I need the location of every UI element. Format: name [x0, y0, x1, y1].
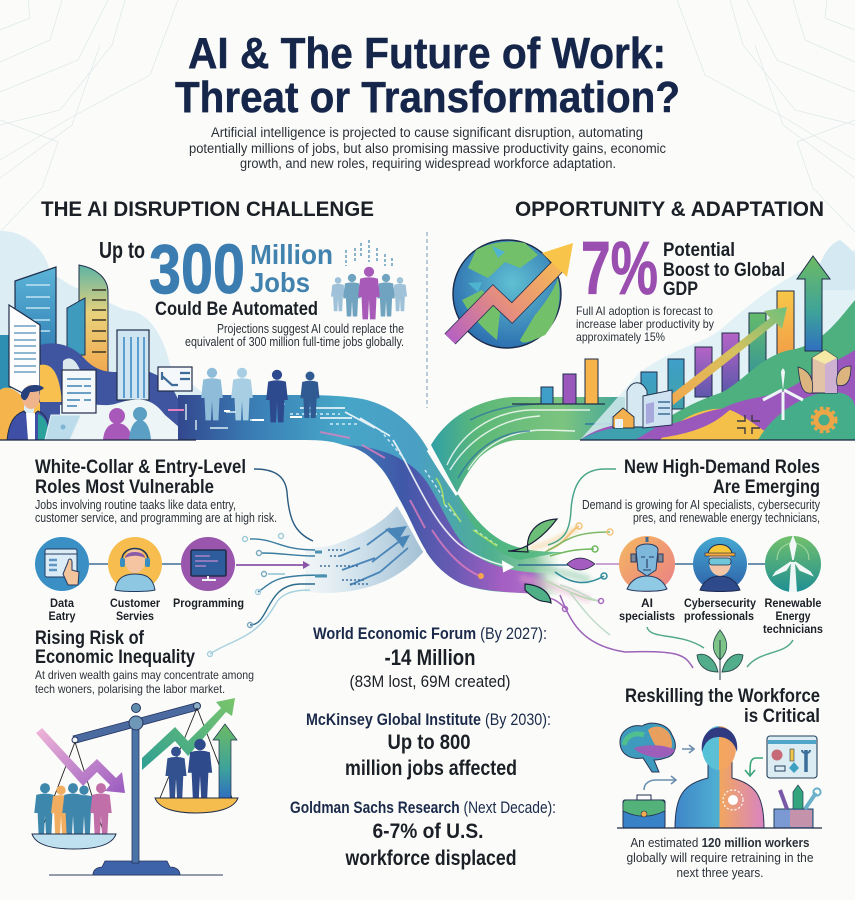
figure: businessman at laptop — [7, 385, 81, 440]
title — [175, 29, 680, 122]
panel: economic inequality: tech woners, polarising the labor market. — [35, 682, 225, 696]
text: growing demand: Demand is growing for AI specialists, cybersecurity — [582, 498, 821, 512]
icon: workforce people — [331, 240, 407, 319]
stat: 7 percent GDP: increase laber productivity by — [576, 317, 714, 331]
stat: 7 percent GDP: GDP — [663, 279, 698, 300]
arrow: falling purple — [36, 728, 125, 793]
panel: economic inequality: Economic Inequality — [35, 647, 195, 668]
heading: vulnerable roles: White-Collar & Entry-Level — [35, 457, 246, 478]
panel: economic inequality: Rising Risk of — [35, 628, 145, 649]
baseline: left scene — [0, 439, 196, 441]
center stat: McKinsey: million jobs affected — [345, 757, 517, 780]
ribbon: blue disruption flow — [178, 395, 562, 596]
fan: connector lines from flow — [518, 469, 793, 668]
illustration: balance scale — [32, 698, 238, 875]
pan: right — [155, 798, 238, 813]
illustration: green hills and growth bars — [580, 240, 855, 440]
icon labels: Customer — [110, 596, 160, 610]
role labels: professionals — [684, 609, 754, 623]
icon: wind energy — [765, 536, 821, 592]
stat: 300 million jobs: Jobs — [250, 267, 310, 298]
icon: factory buildings — [613, 383, 672, 428]
arrow: big green up arrow — [797, 256, 830, 351]
icon labels: Eatry — [48, 609, 76, 623]
role labels: AI — [641, 596, 653, 610]
center stat: World Economic Forum: World Economic Forum (By 2027): — [313, 624, 547, 643]
stat: 7 percent GDP: Full AI adoption is forecast to — [576, 304, 713, 318]
text: routine tasks: customer service, and programming are at high risk. — [35, 511, 277, 525]
panel: economic inequality — [35, 628, 254, 696]
center stat: McKinsey: Up to 800 — [388, 731, 470, 754]
panel: economic inequality: At driven wealth gains may concentrate among — [35, 668, 254, 682]
panel: reskilling the workforce — [617, 686, 822, 880]
text: retraining estimate — [626, 835, 814, 880]
heading: vulnerable roles: Roles Most Vulnerable — [35, 477, 214, 498]
role labels: Cybersecurity — [684, 596, 756, 610]
icon: wind turbine — [763, 368, 803, 420]
stat: 300 million jobs: 300 — [149, 230, 245, 308]
stat: 300 million jobs: Could Be Automated — [155, 298, 318, 320]
icon: cube and leaves — [798, 350, 851, 393]
icon: leaves on the flow — [508, 519, 595, 603]
icon: AI specialist — [619, 536, 675, 592]
stat: 7 percent GDP: Boost to Global — [663, 260, 785, 281]
icon: cybersecurity — [693, 537, 747, 592]
stat: 7 percent GDP: approximately 15% — [576, 330, 665, 344]
icon: chip mark — [737, 415, 760, 434]
text: retraining estimate: next three years. — [676, 865, 764, 880]
center stat: World Economic Forum: -14 Million — [384, 645, 476, 670]
ribbon: green opportunity flow — [431, 397, 625, 493]
stat: 300 million jobs — [99, 230, 404, 349]
stat: 7 percent GDP: 7% — [581, 226, 658, 310]
center stat: World Economic Forum: (83M lost, 69M created) — [350, 672, 510, 691]
icon: document panel — [62, 370, 96, 413]
pan: left — [32, 834, 116, 849]
subtitle text: Artificial intelligence is projected to cause significant disruption, automating — [211, 125, 643, 140]
text: retraining estimate: An estimated 120 million workers — [630, 835, 810, 850]
panel: new high-demand roles — [508, 457, 823, 668]
title: Threat or Transformation? — [175, 73, 680, 122]
icon: brain — [620, 723, 675, 772]
subtitle text: growth, and new roles, requiring widespread workforce adaptation. — [240, 156, 616, 171]
heading: new roles: New High-Demand Roles — [624, 457, 820, 478]
heading: opportunity and adaptation: OPPORTUNITY & ADAPTATION — [515, 198, 824, 221]
center stat: McKinsey — [306, 710, 551, 780]
icon: gear — [812, 408, 836, 432]
panel: white-collar roles — [35, 457, 327, 656]
panel: reskilling the workforce: is Critical — [744, 706, 820, 727]
heading: new roles — [624, 457, 820, 498]
stat: 300 million jobs: equivalent of 300 million full-time jobs globally. — [185, 335, 404, 349]
icon labels: Programming — [173, 596, 244, 610]
center stat: Goldman Sachs: workforce displaced — [345, 847, 516, 870]
figures: suited group — [165, 739, 212, 798]
stat: 300 million jobs: Projections suggest AI could replace the — [217, 322, 404, 336]
icon: chart monitor — [158, 367, 192, 391]
heading: vulnerable roles — [35, 457, 246, 498]
icon: globe with growth arrow — [450, 240, 573, 348]
icon: programming — [181, 537, 235, 591]
stat: 300 million jobs: Up to — [99, 237, 145, 263]
arrow: rising green — [142, 698, 235, 770]
stat: 7 percent GDP: Potential — [663, 240, 735, 261]
illustration: city skyline — [0, 231, 205, 440]
center stat: Goldman Sachs: 6-7% of U.S. — [372, 820, 484, 843]
stat: 7 percent GDP — [576, 226, 785, 344]
icon labels: Data — [50, 596, 74, 610]
arrow: green up — [213, 724, 237, 798]
role labels: Energy — [776, 609, 811, 623]
center stat: McKinsey: McKinsey Global Institute (By 2030): — [306, 710, 551, 729]
figures: workers — [34, 783, 112, 835]
icon: customer service — [108, 537, 162, 592]
role labels: specialists — [619, 609, 675, 623]
icon: briefcase — [623, 795, 665, 828]
center stat: Goldman Sachs: Goldman Sachs Research (Next Decade): — [290, 798, 556, 817]
role labels — [619, 596, 823, 636]
icon: data entry — [35, 537, 89, 591]
icon: tools panel — [767, 736, 817, 778]
arrow: rising trend over bars — [672, 307, 787, 405]
connector lines into flow — [89, 469, 327, 656]
heading: the AI disruption challenge: THE AI DISRUPTION CHALLENGE — [41, 198, 374, 221]
chart: small bars — [512, 359, 605, 404]
heading: new roles: Are Emerging — [713, 477, 820, 498]
title: AI & The Future of Work: — [188, 29, 666, 78]
arrows into person — [644, 745, 763, 790]
role labels: Renewable — [764, 596, 822, 610]
icon: sprout — [697, 630, 743, 680]
text: routine tasks — [35, 498, 277, 525]
figures crossing the digital flow — [168, 368, 320, 430]
crossing gaps — [396, 450, 457, 552]
figure: person reskilling — [675, 726, 764, 828]
icon: tool cup — [774, 785, 821, 828]
role labels: technicians — [763, 622, 823, 636]
center stat: World Economic Forum — [313, 624, 547, 691]
center stat: Goldman Sachs — [290, 798, 556, 870]
text: growing demand — [582, 498, 821, 525]
stat: 300 million jobs: Million — [250, 239, 333, 270]
ribbon: pale fading data flow — [305, 505, 425, 593]
panel: reskilling the workforce: Reskilling the Workforce — [625, 686, 820, 707]
text: growing demand: pres, and renewable energy technicians, — [633, 511, 820, 525]
text: routine tasks: Jobs involving routine taaks like data entry, — [35, 498, 236, 512]
subtitle text: potentially millions of jobs, but also promising massive productivity gains, economic — [189, 141, 666, 156]
subtitle text — [189, 125, 666, 171]
icon labels — [48, 596, 244, 623]
icon labels: Servies — [116, 609, 154, 623]
text: retraining estimate: globally will require retraining in the — [626, 850, 814, 865]
